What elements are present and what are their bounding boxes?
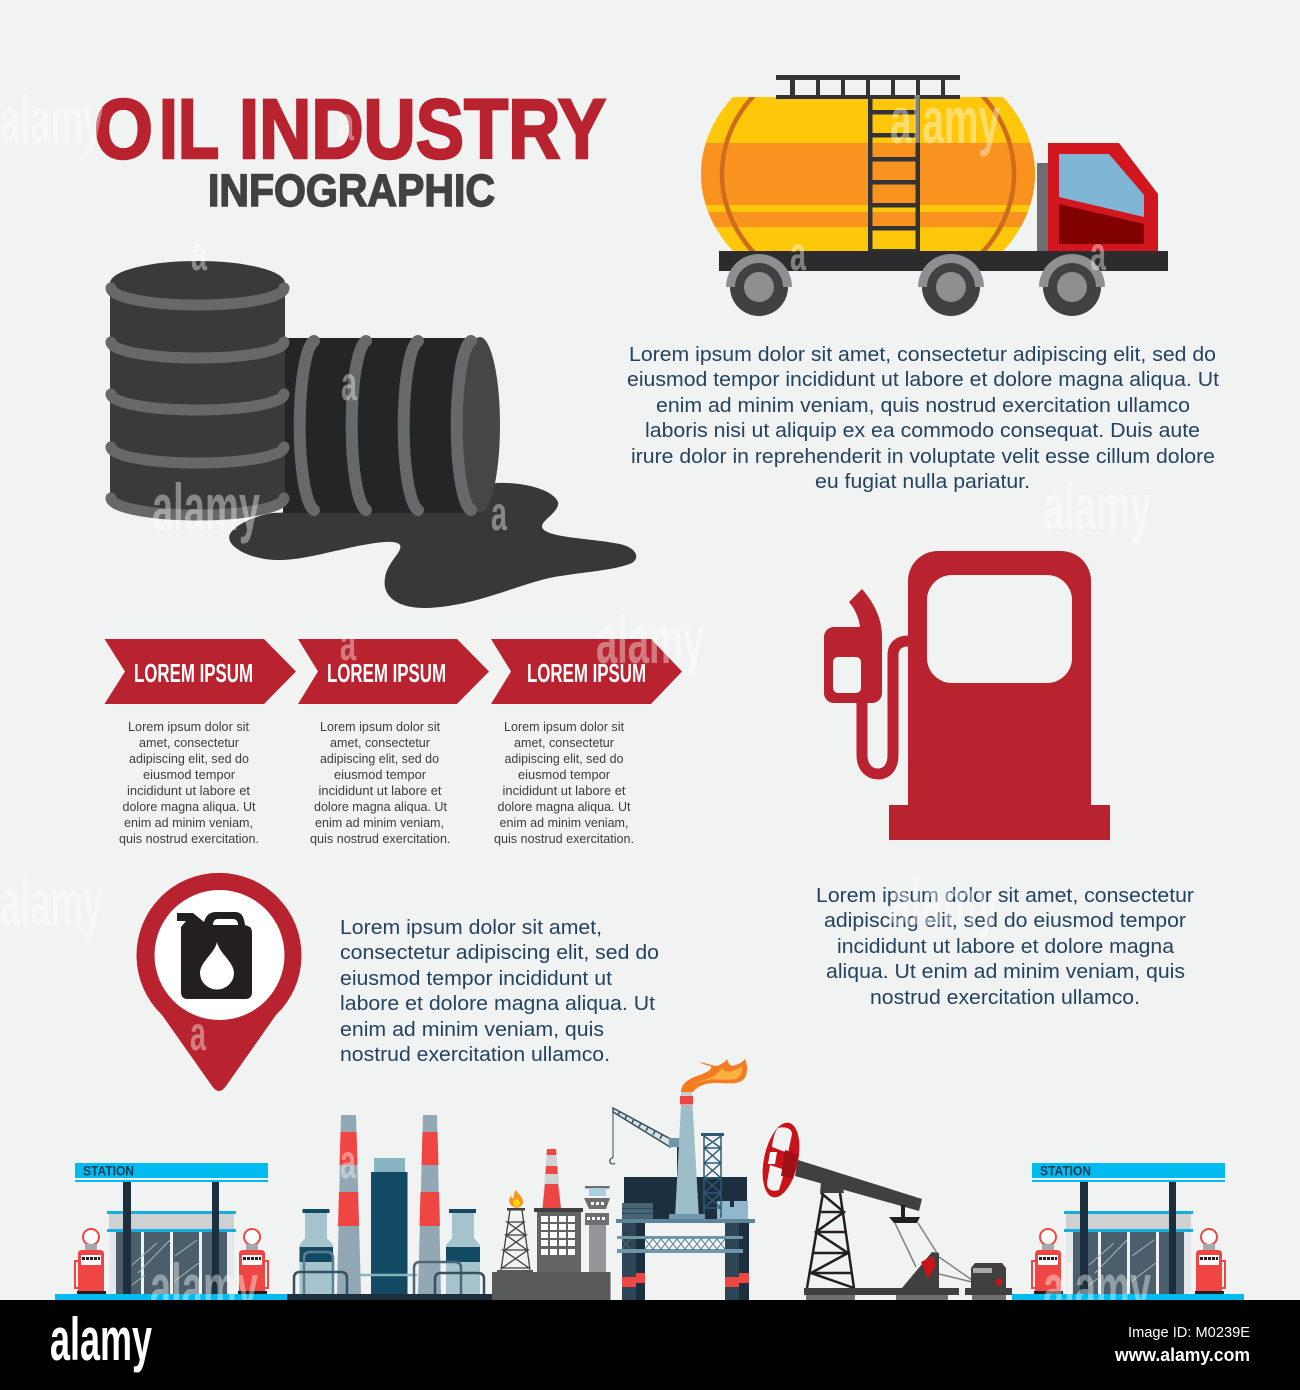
image id: Image ID: M0239E	[1128, 1324, 1250, 1341]
subheading: infographic: INFOGRAPHIC	[208, 165, 495, 216]
pump body	[889, 551, 1110, 840]
arrow 3: LOREM IPSUM	[527, 658, 646, 688]
watermarks: alamy	[0, 865, 103, 939]
sign	[1032, 1163, 1225, 1178]
text column 2: incididunt ut labore et	[318, 783, 442, 798]
chassis	[719, 251, 1168, 271]
watermarks: alamy	[890, 865, 998, 939]
arrow 1	[104, 639, 296, 704]
icon: map pin with jerry can	[137, 873, 302, 1091]
oil drop	[200, 942, 234, 990]
stack	[669, 1092, 705, 1219]
deck	[616, 1219, 755, 1223]
paragraph: pump text: nostrud exercitation ullamco.	[870, 987, 1140, 1009]
paragraph: pin text: eiusmod tempor incididunt ut	[340, 968, 612, 990]
refinery floor	[287, 1294, 492, 1300]
legs	[622, 1223, 749, 1300]
dark block	[624, 1177, 747, 1220]
small derrick with flame	[497, 1190, 533, 1272]
arrow 2	[298, 639, 489, 704]
title	[94, 82, 606, 216]
watermarks: alamy	[1043, 1250, 1151, 1324]
text column 3: eiusmod tempor	[518, 767, 611, 782]
gas station right: STATION	[1040, 1164, 1091, 1178]
cab	[1048, 143, 1158, 251]
text column 3: incididunt ut labore et	[502, 783, 626, 798]
paragraph: truck text: eu fugiat nulla pariatur.	[815, 471, 1030, 493]
nozzle	[824, 589, 882, 703]
flame	[681, 1059, 747, 1092]
posts	[123, 1182, 219, 1294]
horse head	[756, 1119, 806, 1201]
control tower	[584, 1186, 610, 1272]
sign	[75, 1163, 268, 1178]
paragraph: pin text: nostrud exercitation ullamco.	[340, 1044, 610, 1066]
crane	[610, 1108, 688, 1200]
text column 1: incididunt ut labore et	[127, 783, 250, 798]
watermarks: a	[340, 1136, 356, 1189]
gas station right	[1012, 1163, 1244, 1300]
text column 1	[119, 719, 259, 846]
text column 1: dolore magna aliqua. Ut	[122, 799, 256, 814]
text column 1: Lorem ipsum dolor sit	[128, 719, 249, 734]
pin	[137, 873, 302, 1091]
watermarks: a	[338, 98, 354, 151]
text column 2	[310, 719, 450, 846]
website: www.alamy.com	[1114, 1345, 1250, 1365]
arrow 3	[491, 639, 682, 704]
paragraph: pin text	[340, 917, 659, 1066]
paragraph: truck text: eiusmod tempor incididunt ut labore et dolore magna aliqua. Ut	[627, 369, 1219, 391]
paragraph: pump text: Lorem ipsum dolor sit amet, consectetur	[816, 885, 1194, 907]
jerry can	[177, 912, 252, 999]
text column 3: dolore magna aliqua. Ut	[498, 799, 631, 814]
watermarks	[0, 83, 1151, 1324]
heading: oil industry: IL	[159, 82, 218, 176]
braces	[617, 1236, 743, 1253]
bases	[804, 1288, 1012, 1300]
oil puddle	[229, 483, 636, 608]
icon: tanker truck	[701, 75, 1168, 316]
central tower	[371, 1158, 408, 1294]
shop	[109, 1232, 234, 1294]
hose	[862, 641, 908, 774]
engine	[971, 1263, 1006, 1288]
paragraph: pump text: incididunt ut labore et dolore magna	[837, 936, 1175, 958]
chimney right	[418, 1115, 441, 1294]
icon: oil barrels and spill	[110, 261, 636, 608]
fuel dispenser left	[75, 1229, 106, 1294]
refinery	[287, 1115, 610, 1300]
fuel dispenser left	[1032, 1229, 1063, 1294]
watermarks: a	[341, 358, 357, 411]
text column 2: quis nostrud exercitation.	[310, 831, 450, 846]
watermarks: alamy	[596, 603, 704, 677]
paragraph: truck text: irure dolor in reprehenderit in voluptate velit esse cillum dolore	[631, 446, 1215, 468]
watermarks: a	[1090, 228, 1106, 281]
text column 1: quis nostrud exercitation.	[119, 831, 259, 846]
text column 2: Lorem ipsum dolor sit	[320, 719, 440, 734]
standing barrel	[110, 261, 285, 520]
offshore platform	[610, 1059, 755, 1300]
text column 3: Lorem ipsum dolor sit	[504, 719, 624, 734]
factory chimney	[542, 1149, 561, 1208]
watermarks: alamy	[890, 83, 1000, 157]
paragraph: truck text	[627, 344, 1219, 493]
posts	[1080, 1182, 1176, 1294]
chimney left	[337, 1115, 361, 1294]
watermarks: a	[491, 488, 507, 541]
text column 3: adipiscing elit, sed do	[504, 751, 624, 766]
text column 3	[494, 719, 634, 846]
pump window	[927, 575, 1072, 683]
heading: oil industry: O	[94, 82, 153, 176]
derrick	[807, 1193, 854, 1288]
top ladder rack	[776, 75, 960, 99]
text column 3: quis nostrud exercitation.	[494, 831, 634, 846]
paragraph: truck text: enim ad minim veniam, quis nostrud exercitation ullamco	[656, 395, 1190, 417]
text column 3: amet, consectetur	[514, 735, 615, 750]
text column 3: enim ad minim veniam,	[500, 815, 628, 830]
hanger and cables	[889, 1205, 972, 1282]
tank right	[446, 1209, 480, 1294]
arrow banners	[104, 639, 682, 704]
crank	[902, 1252, 939, 1288]
side ladder	[868, 99, 920, 267]
paragraph: pin text: consectetur adipiscing elit, sed do	[340, 942, 659, 964]
shop	[1066, 1232, 1191, 1294]
gas station left: STATION	[83, 1164, 134, 1178]
paragraph: pin text: Lorem ipsum dolor sit amet,	[340, 917, 602, 939]
paragraph: pump text	[816, 885, 1194, 1009]
text column 1: eiusmod tempor	[143, 767, 236, 782]
watermarks: alamy	[0, 83, 103, 157]
arrow 1: LOREM IPSUM	[134, 658, 253, 688]
text column 1: adipiscing elit, sed do	[129, 751, 249, 766]
arrow 2: LOREM IPSUM	[327, 658, 446, 688]
text column 2: eiusmod tempor	[334, 767, 427, 782]
paragraph: pump text: aliqua. Ut enim ad minim veniam, quis	[826, 961, 1185, 983]
pumpjack	[756, 1119, 1012, 1300]
wheels	[726, 254, 1105, 316]
fuel dispenser right	[1195, 1229, 1225, 1294]
heading: oil industry: INDUSTRY	[239, 82, 606, 176]
pipes	[294, 1252, 484, 1294]
watermarks: a	[340, 618, 356, 671]
paragraph: pin text: labore et dolore magna aliqua. Ut	[340, 993, 655, 1015]
lying barrel	[283, 337, 500, 513]
watermarks: alamy	[150, 1250, 258, 1324]
paragraph: pump text: adipiscing elit, sed do eiusmod tempor	[824, 910, 1186, 932]
derrick lattice	[701, 1133, 724, 1218]
text column 2: amet, consectetur	[330, 735, 431, 750]
paragraph: truck text: laboris nisi ut aliquip ex ea commodo consequat. Duis aute	[645, 420, 1200, 442]
text column 2: enim ad minim veniam,	[315, 815, 444, 830]
factory building	[534, 1208, 583, 1272]
text column 2: dolore magna aliqua. Ut	[314, 799, 447, 814]
beam	[795, 1160, 922, 1211]
watermarks: alamy	[152, 470, 260, 544]
watermarks: a	[790, 228, 806, 281]
text column 1: enim ad minim veniam,	[124, 815, 253, 830]
watermarks: alamy	[1043, 470, 1151, 544]
tank	[701, 97, 1035, 251]
watermarks: a	[190, 1008, 206, 1061]
floor	[55, 1294, 288, 1300]
tank left	[300, 1209, 333, 1294]
boxes	[622, 1203, 653, 1219]
paragraph: truck text: Lorem ipsum dolor sit amet, consectetur adipiscing elit, sed do	[629, 344, 1216, 366]
bottom black bar	[0, 1300, 1300, 1390]
icon: fuel pump	[824, 551, 1110, 840]
gas station left	[55, 1163, 288, 1300]
fuel dispenser right	[238, 1229, 268, 1294]
alamy logo: alamy	[50, 1306, 152, 1373]
text column 2: adipiscing elit, sed do	[320, 751, 439, 766]
cab connector	[1037, 163, 1048, 251]
text column 1: amet, consectetur	[139, 735, 240, 750]
watermarks: a	[191, 228, 207, 281]
floor	[1012, 1294, 1244, 1300]
gray base	[492, 1272, 610, 1300]
paragraph: pin text: enim ad minim veniam, quis	[340, 1019, 604, 1041]
